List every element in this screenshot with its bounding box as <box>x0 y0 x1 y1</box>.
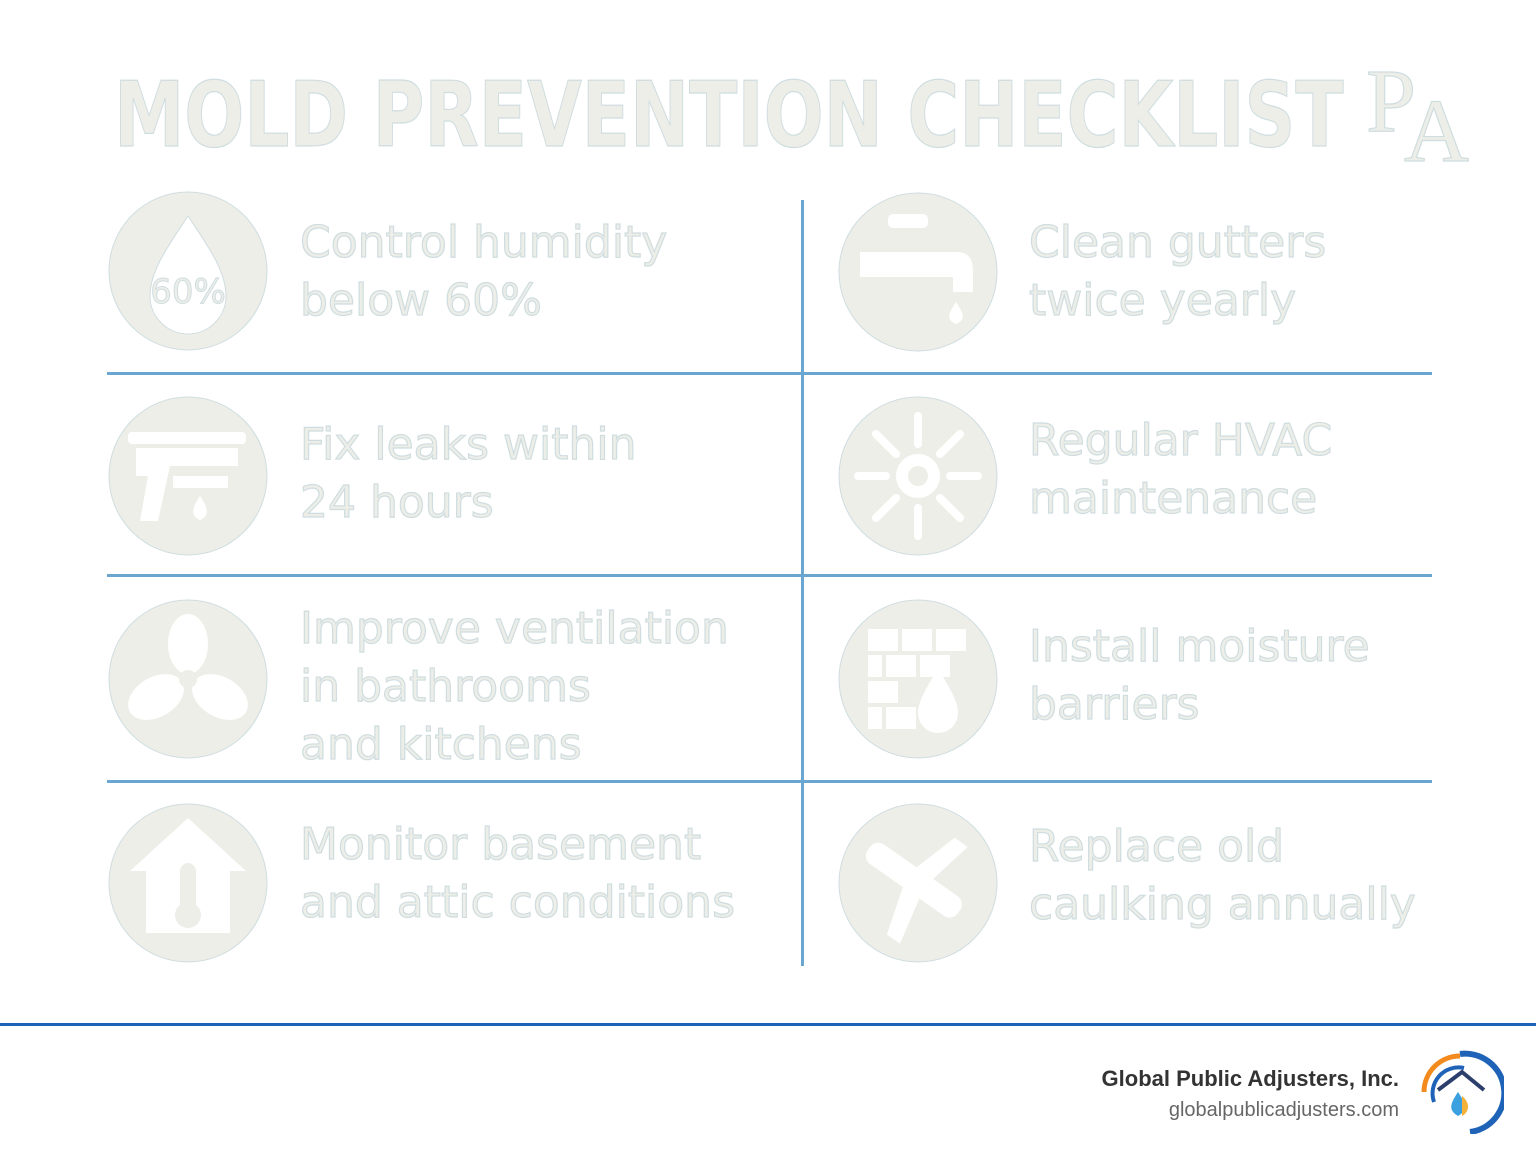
icon: fan <box>108 600 268 758</box>
text: HVAC <box>1029 415 1332 524</box>
grid lines <box>801 200 804 966</box>
icon: faucet <box>838 192 998 352</box>
text: basement: Monitor basement <box>300 819 701 870</box>
text: ventilation: in bathrooms <box>300 661 591 712</box>
text: gutters <box>1029 217 1326 326</box>
text: humidity <box>300 217 667 326</box>
text: caulking: caulking annually <box>1029 879 1416 930</box>
text: ventilation: Improve ventilation <box>300 603 729 654</box>
text: basement: and attic conditions <box>300 877 735 928</box>
footer: company name: globalpublicadjusters.com <box>1169 1099 1399 1121</box>
title: MOLD PREVENTION CHECKLIST <box>114 63 1344 168</box>
text: HVAC: maintenance <box>1029 473 1317 524</box>
footer: company name: Global Public Adjusters, Inc. <box>1102 1066 1399 1091</box>
text: humidity: Control humidity <box>300 217 667 268</box>
icon: moisture barrier wall <box>838 600 998 758</box>
text: moisture: Install moisture <box>1029 621 1370 672</box>
text: ventilation: and kitchens <box>300 719 582 770</box>
text: HVAC: Regular HVAC <box>1029 415 1332 466</box>
text: caulking: Replace old <box>1029 821 1284 872</box>
text: moisture <box>1029 621 1370 730</box>
logo: PA monogram <box>1366 52 1469 181</box>
text: leaks: 24 hours <box>300 477 494 528</box>
icon: humidity drop <box>108 192 268 350</box>
text: gutters: Clean gutters <box>1029 217 1326 268</box>
logo: PA monogram: P <box>1366 52 1416 151</box>
text: basement <box>300 819 735 928</box>
icon: humidity drop: 60% <box>150 272 226 312</box>
icon: leak pipe <box>108 396 268 556</box>
logo: PA monogram: A <box>1404 82 1469 181</box>
text: leaks: Fix leaks within <box>300 419 636 470</box>
text: caulking <box>1029 821 1416 930</box>
text: leaks <box>300 419 636 528</box>
icon: HVAC <box>838 396 998 556</box>
text: moisture: barriers <box>1029 679 1200 730</box>
text: ventilation <box>300 603 729 770</box>
text: gutters: twice yearly <box>1029 275 1296 326</box>
icon: caulking gun <box>838 804 998 962</box>
footer divider <box>0 1023 1536 1026</box>
text: humidity: below 60% <box>300 275 542 326</box>
icon: house thermometer <box>108 804 268 962</box>
footer logo <box>1422 1050 1504 1134</box>
footer: company name <box>1102 1066 1399 1121</box>
